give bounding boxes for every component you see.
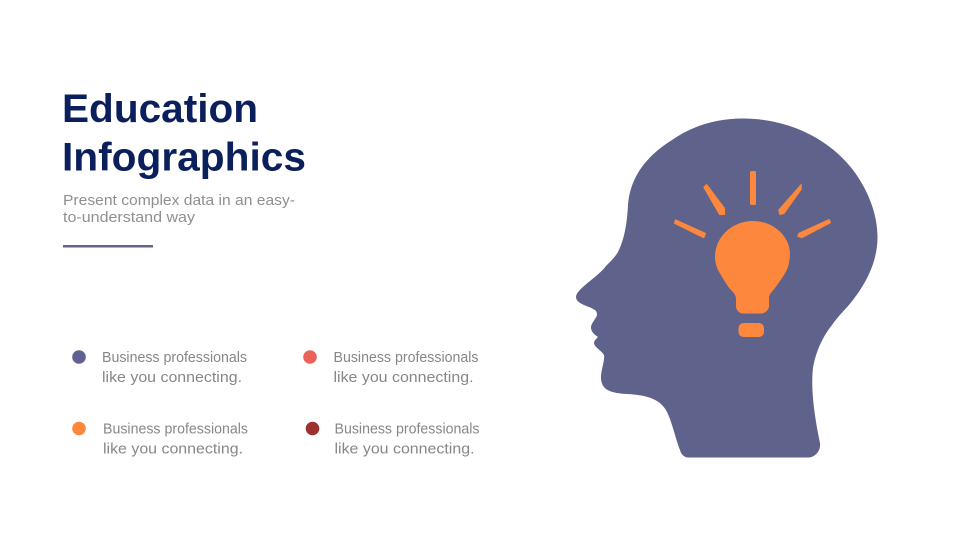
light rays bbox=[674, 172, 830, 238]
title bbox=[62, 87, 306, 180]
bulb base bbox=[738, 323, 764, 337]
icon: head with light bulb bbox=[576, 118, 878, 458]
legend item: orange: like you connecting. bbox=[103, 440, 243, 458]
legend item: dark red bbox=[306, 420, 480, 458]
legend item: slate: Business professionals bbox=[102, 349, 247, 366]
legend item: coral: Business professionals bbox=[334, 349, 478, 366]
subtitle: Present complex data in an easy- bbox=[63, 192, 295, 209]
legend item: dark red: Business professionals bbox=[334, 420, 480, 438]
legend item: orange: Business professionals bbox=[103, 420, 248, 438]
title underline bbox=[63, 245, 153, 248]
light bulb bbox=[715, 221, 790, 314]
legend item: slate: like you connecting. bbox=[102, 369, 242, 386]
subtitle bbox=[63, 192, 295, 226]
legend item: dark red: like you connecting. bbox=[334, 440, 474, 458]
legend item: coral: like you connecting. bbox=[334, 369, 474, 386]
title: Infographics bbox=[62, 136, 306, 180]
legend item: slate bbox=[72, 349, 247, 386]
legend item: coral bbox=[303, 349, 478, 386]
subtitle: to-understand way bbox=[63, 209, 196, 226]
legend item: orange bbox=[72, 420, 248, 458]
head silhouette bbox=[576, 118, 878, 458]
title: Education bbox=[62, 87, 258, 131]
